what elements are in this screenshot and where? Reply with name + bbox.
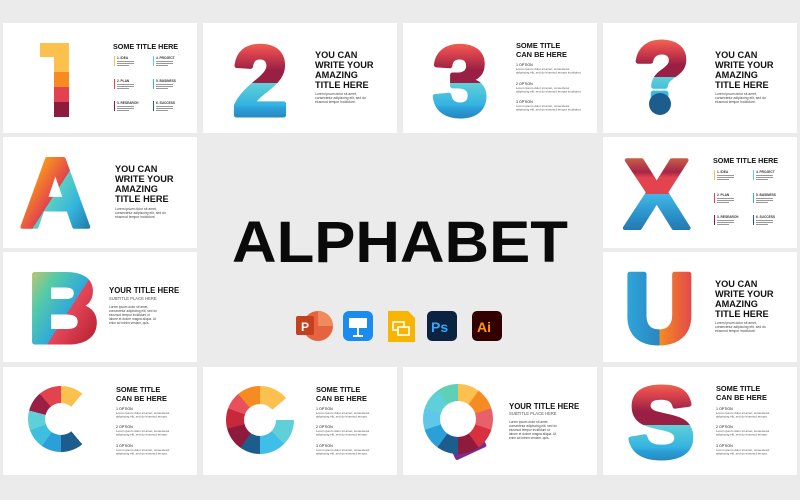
- card4 text: eiusmod tempor incididunt.: [715, 100, 756, 104]
- card3 text: SOME TITLE: [516, 41, 560, 50]
- card U text: YOU CAN: [715, 279, 758, 289]
- card U text: WRITE YOUR: [715, 289, 774, 299]
- card U text: [715, 279, 774, 333]
- card S text: Lorem ipsum dolor sit amet, consectetur: [716, 429, 769, 433]
- card3 text: 1 OPTION: [516, 63, 533, 67]
- card G text: Lorem ipsum dolor sit amet, consectetur: [316, 429, 369, 433]
- card Q text: YOUR TITLE HERE: [509, 402, 579, 411]
- card S text: Lorem ipsum dolor sit amet, consectetur: [716, 448, 769, 452]
- card G text: 1 OPTION: [316, 407, 333, 411]
- icon: Photoshop: [427, 311, 457, 341]
- card C text: 3 OPTION: [116, 444, 133, 448]
- icon: Photoshop: Ps: [431, 319, 448, 335]
- card2 text: eiusmod tempor incididunt.: [315, 100, 356, 104]
- card X text: 5. BUSINESS: [756, 193, 776, 197]
- card1 text: 4. PROJECT: [156, 56, 175, 60]
- letter 3: 3: [433, 26, 488, 136]
- card S text: 1 OPTION: [716, 407, 733, 411]
- card B text: YOUR TITLE HERE: [109, 286, 179, 295]
- card1 text: 5. BUSINESS: [156, 79, 176, 83]
- card C text: Lorem ipsum dolor sit amet, consectetur: [116, 429, 169, 433]
- card3 text: CAN BE HERE: [516, 50, 567, 59]
- card3 text: 2 OPTION: [516, 82, 533, 86]
- card U text: eiusmod tempor incididunt.: [715, 329, 756, 333]
- card3 text: Lorem ipsum dolor sit amet, consectetur: [516, 67, 569, 71]
- card S text: SOME TITLE: [716, 384, 760, 393]
- card2 text: WRITE YOUR: [315, 60, 374, 70]
- card X text: 2. PLAN: [717, 193, 730, 197]
- card1 text: 6. SUCCESS: [156, 101, 175, 105]
- card G text: adipiscing elit, sed do eiusmod tempor.: [316, 432, 368, 436]
- card3 text: adipiscing elit, sed do eiusmod tempor incididunt.: [516, 108, 582, 112]
- letter A: A: [20, 138, 91, 248]
- card A text: YOU CAN: [115, 164, 158, 174]
- letter 1: [40, 43, 69, 117]
- card S text: 2 OPTION: [716, 425, 733, 429]
- card A text: WRITE YOUR: [115, 174, 174, 184]
- title: ALPHABET: [232, 210, 568, 275]
- card1 text: 3. RESEARCH: [117, 101, 139, 105]
- card A text: consectetur adipiscing elit, sed do: [115, 211, 166, 215]
- card C text: 1 OPTION: [116, 407, 133, 411]
- card3 text: [516, 41, 582, 112]
- card Q text: eiusmod tempor incididunt ut: [509, 428, 550, 432]
- card C text: [116, 385, 169, 456]
- card X text: [713, 156, 778, 225]
- card B text: SUBTITLE PLACE HERE: [109, 296, 157, 301]
- card2 text: Lorem ipsum dolor sit amet,: [315, 92, 357, 96]
- card1 text: 1. IDEA: [117, 56, 129, 60]
- card A text: AMAZING: [115, 184, 158, 194]
- card G text: CAN BE HERE: [316, 394, 367, 403]
- card S text: Lorem ipsum dolor sit amet, consectetur: [716, 411, 769, 415]
- card1 text: 2. PLAN: [117, 79, 130, 83]
- card A text: Lorem ipsum dolor sit amet,: [115, 207, 157, 211]
- card X text: 4. PROJECT: [756, 170, 775, 174]
- card G text: [316, 385, 369, 456]
- card B text: eiusmod tempor incididunt ut: [109, 313, 150, 317]
- card A text: eiusmod tempor incididunt.: [115, 215, 156, 219]
- icon: Illustrator: [472, 311, 502, 341]
- card C text: Lorem ipsum dolor sit amet, consectetur: [116, 411, 169, 415]
- card4 text: consectetur adipiscing elit, sed do: [715, 96, 766, 100]
- card X text: 6. SUCCESS: [756, 215, 775, 219]
- icon: question mark: ?: [634, 25, 689, 125]
- card1 text: SOME TITLE HERE: [113, 42, 178, 51]
- card1 text: [113, 42, 178, 111]
- card S text: adipiscing elit, sed do eiusmod tempor.: [716, 432, 768, 436]
- letter Q: [423, 384, 493, 460]
- card G text: Lorem ipsum dolor sit amet, consectetur: [316, 448, 369, 452]
- card B text: Lorem ipsum dolor sit amet,: [109, 305, 148, 309]
- card C text: 2 OPTION: [116, 425, 133, 429]
- card Q text: consectetur adipiscing elit, sed do: [509, 424, 557, 428]
- card X text: SOME TITLE HERE: [713, 156, 778, 165]
- card S text: adipiscing elit, sed do eiusmod tempor.: [716, 452, 768, 456]
- icon: Keynote: [343, 311, 373, 341]
- card C text: adipiscing elit, sed do eiusmod tempor.: [116, 432, 168, 436]
- card S text: CAN BE HERE: [716, 393, 767, 402]
- card S text: [716, 384, 769, 456]
- card C text: Lorem ipsum dolor sit amet, consectetur: [116, 448, 169, 452]
- card A text: TITLE HERE: [115, 194, 169, 204]
- card3 text: 3 OPTION: [516, 100, 533, 104]
- letter S: S: [628, 367, 695, 479]
- card G text: Lorem ipsum dolor sit amet, consectetur: [316, 411, 369, 415]
- card U text: consectetur adipiscing elit, sed do: [715, 325, 766, 329]
- card4 text: YOU CAN: [715, 50, 758, 60]
- letter U: U: [624, 253, 695, 363]
- card2 text: consectetur adipiscing elit, sed do: [315, 96, 366, 100]
- card U text: Lorem ipsum dolor sit amet,: [715, 321, 757, 325]
- card B text: enim ad minim veniam, quis.: [109, 321, 150, 325]
- card Q text: [509, 402, 579, 440]
- card Q text: Lorem ipsum dolor sit amet,: [509, 420, 548, 424]
- card X text: 3. RESEARCH: [717, 215, 739, 219]
- card U text: TITLE HERE: [715, 309, 769, 319]
- card B text: [109, 286, 179, 325]
- icon: Google Slides: [388, 311, 415, 342]
- card4 text: [715, 50, 774, 104]
- card B text: consectetur adipiscing elit, sed do: [109, 309, 157, 313]
- card G text: adipiscing elit, sed do eiusmod tempor.: [316, 414, 368, 418]
- card4 text: TITLE HERE: [715, 80, 769, 90]
- icon: PowerPoint: P: [301, 320, 309, 334]
- card S text: adipiscing elit, sed do eiusmod tempor.: [716, 414, 768, 418]
- card4 text: Lorem ipsum dolor sit amet,: [715, 92, 757, 96]
- card Q text: enim ad minim veniam, quis.: [509, 436, 550, 440]
- card2 text: [315, 50, 374, 104]
- card S text: 3 OPTION: [716, 444, 733, 448]
- card X text: 1. IDEA: [717, 170, 729, 174]
- card3 text: Lorem ipsum dolor sit amet, consectetur: [516, 104, 569, 108]
- icon: PowerPoint: [296, 311, 333, 341]
- card G text: adipiscing elit, sed do eiusmod tempor.: [316, 452, 368, 456]
- card U text: AMAZING: [715, 299, 758, 309]
- card A text: [115, 164, 174, 219]
- letter B: B: [28, 253, 99, 363]
- card2 text: TITLE HERE: [315, 80, 369, 90]
- card C text: adipiscing elit, sed do eiusmod tempor.: [116, 452, 168, 456]
- card4 text: WRITE YOUR: [715, 60, 774, 70]
- card C text: adipiscing elit, sed do eiusmod tempor.: [116, 414, 168, 418]
- letter G: [226, 386, 294, 454]
- card C text: SOME TITLE: [116, 385, 160, 394]
- card3 text: adipiscing elit, sed do eiusmod tempor incididunt.: [516, 90, 582, 94]
- card3 text: adipiscing elit, sed do eiusmod tempor incididunt.: [516, 70, 582, 74]
- card G text: 2 OPTION: [316, 425, 333, 429]
- letter C: [28, 386, 94, 452]
- card2 text: YOU CAN: [315, 50, 358, 60]
- card4 text: AMAZING: [715, 70, 758, 80]
- card B text: labore et dolore magna aliqua. Ut: [109, 317, 156, 321]
- letter 2: 2: [233, 26, 288, 136]
- card G text: 3 OPTION: [316, 444, 333, 448]
- card2 text: AMAZING: [315, 70, 358, 80]
- card3 text: Lorem ipsum dolor sit amet, consectetur: [516, 86, 569, 90]
- icon: Illustrator: Ai: [477, 319, 491, 335]
- letter X: X: [624, 139, 689, 249]
- card G text: SOME TITLE: [316, 385, 360, 394]
- card C text: CAN BE HERE: [116, 394, 167, 403]
- card Q text: SUBTITLE PLACE HERE: [509, 411, 557, 416]
- card Q text: labore et dolore magna aliqua. Ut: [509, 432, 556, 436]
